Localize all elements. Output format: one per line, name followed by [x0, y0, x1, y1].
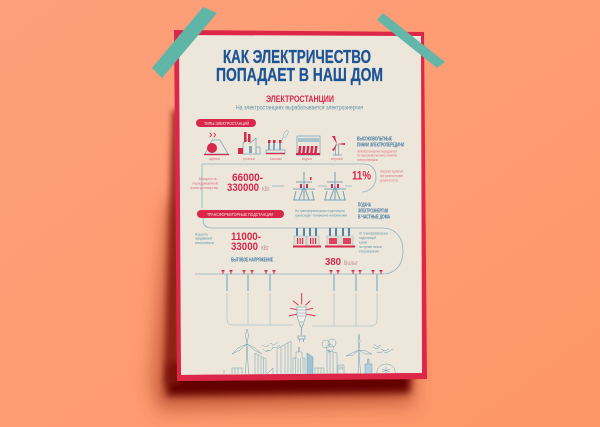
icon: wind turbine left	[232, 329, 262, 374]
house wiring	[227, 274, 377, 326]
text: substation note	[295, 209, 347, 218]
icon: substation 2	[325, 228, 355, 248]
heading: supply to private homes: В ЧАСТНЫЕ ДОМА	[358, 214, 390, 220]
icon: light bulb	[289, 294, 315, 342]
heading: supply to private homes	[358, 202, 390, 220]
icon: birds right	[373, 344, 393, 353]
text: substation right note	[359, 232, 388, 254]
poster sheet	[174, 30, 427, 381]
icon: transmission tower 1	[293, 172, 315, 200]
insulators	[222, 270, 382, 274]
text: distribution power: электроэнергии	[195, 241, 214, 245]
icon: hydro plant: водные	[302, 157, 312, 161]
text: distribution power: Мощность	[195, 232, 208, 236]
heading: supply to private homes: ЭЛЕКТРОЭНЕРГИИ	[358, 208, 388, 214]
tape: left	[152, 7, 217, 78]
icon: hydro plant	[296, 136, 320, 161]
text: substation right note: электронапряжение	[359, 250, 379, 254]
figure: 380 volts: Вольт	[344, 260, 358, 267]
text: substation right note: От трансформаторных	[359, 232, 388, 236]
text: transmitted power: передаваемой	[192, 182, 218, 186]
text: losses note: Энергии теряется	[380, 170, 403, 174]
icon: wind turbine	[331, 136, 345, 161]
text: high-voltage description: электропередачи	[357, 158, 378, 162]
icon: wind turbine: ветровые	[331, 157, 343, 161]
pill: station types	[196, 119, 256, 127]
text: substation right note: к домам	[359, 240, 367, 244]
figure: 380 volts	[325, 256, 358, 268]
text: transmitted power: Мощность	[199, 177, 217, 181]
figure: 11000-33000 kV: КВт	[261, 245, 269, 252]
figure: 66000-330000 kV	[227, 172, 270, 194]
text: transmitted power: электроэнергии	[190, 186, 218, 190]
figure: 66000-330000 kV: 330000	[227, 182, 259, 194]
text: high-voltage description: по высоковольтным линиям	[357, 154, 397, 158]
icon: coal plant	[238, 132, 260, 161]
city skyline	[224, 341, 344, 374]
text: transmitted power	[190, 177, 218, 190]
figure: 11 percent: 11%	[352, 170, 371, 182]
icon: tree	[322, 339, 336, 353]
text: distribution power	[195, 232, 214, 245]
text: substation right note: поступает низкое	[359, 245, 382, 249]
figure: 66000-330000 kV: 66000-	[232, 172, 263, 184]
text: substation note: На трансформаторных подстанциях	[295, 209, 345, 213]
poster bottom edge	[177, 373, 427, 381]
heading: supply to private homes: ПОДАЧА	[358, 202, 371, 208]
title	[216, 47, 383, 85]
connector between towers	[272, 185, 327, 187]
text: losses note	[380, 170, 403, 182]
text: distribution power: передаваемой	[195, 236, 212, 240]
heading: high-voltage lines: ЛИНИИ ЭЛЕКТРОПЕРЕДАЧИ	[357, 142, 404, 148]
heading: power stations: ЭЛЕКТРОСТАНЦИИ	[266, 94, 334, 105]
icon: transmission tower 2	[324, 172, 346, 200]
pill: transformer substations: ТРАНСФОРМАТОРНЫЕ ПОДСТАНЦИИ	[207, 212, 273, 218]
text: substation note: происходит понижение напряжения	[295, 214, 347, 218]
tape: right	[377, 13, 445, 68]
connector line: lower loop	[195, 218, 403, 274]
text: substation right note: подстанций	[359, 236, 376, 240]
heading: high-voltage lines	[357, 136, 404, 148]
heading: high-voltage lines: ВЫСОКОВОЛЬТНЫЕ	[357, 136, 392, 142]
figure: 66000-330000 kV: КВт	[262, 186, 270, 193]
icon: wind turbine right	[346, 334, 372, 374]
figure: 11000-33000 kV: 33000	[231, 241, 258, 253]
subtitle: На электростанциях вырабатывается электроэнергия	[236, 104, 363, 112]
text: losses note: при транспортировке	[380, 174, 403, 178]
connector line: upper loop	[202, 164, 376, 208]
text: high-voltage description	[357, 150, 397, 162]
text: losses note: уровня в сетях	[380, 178, 398, 182]
figure: 11000-33000 kV: 11000-	[231, 231, 261, 243]
icon: small tower	[365, 359, 372, 374]
icon: birds left	[262, 342, 280, 352]
icon: gas plant	[266, 131, 288, 161]
icon: round bush	[377, 364, 395, 374]
figure: 380 volts: 380	[325, 256, 341, 268]
icon: nuclear plant: ядерные	[209, 157, 220, 161]
icon: substation 1	[293, 228, 321, 248]
title: ПОПАДАЕТ В НАШ ДОМ	[216, 65, 383, 85]
pill: transformer substations	[197, 210, 284, 218]
pill: station types: ТИПЫ ЭЛЕКТРОСТАНЦИЙ	[204, 119, 249, 126]
icon: nuclear plant	[204, 133, 229, 161]
poster shadow	[152, 110, 414, 410]
figure: 11000-33000 kV	[231, 231, 269, 253]
heading: household voltage: БЫТОВОЕ НАПРЯЖЕНИЕ	[231, 258, 273, 264]
text: high-voltage description: Электроэнергия передается	[357, 150, 397, 154]
title: КАК ЭЛЕКТРИЧЕСТВО	[223, 47, 371, 67]
icon: gas plant: газовые	[270, 157, 282, 161]
icon: coal plant: угольные	[243, 157, 255, 161]
